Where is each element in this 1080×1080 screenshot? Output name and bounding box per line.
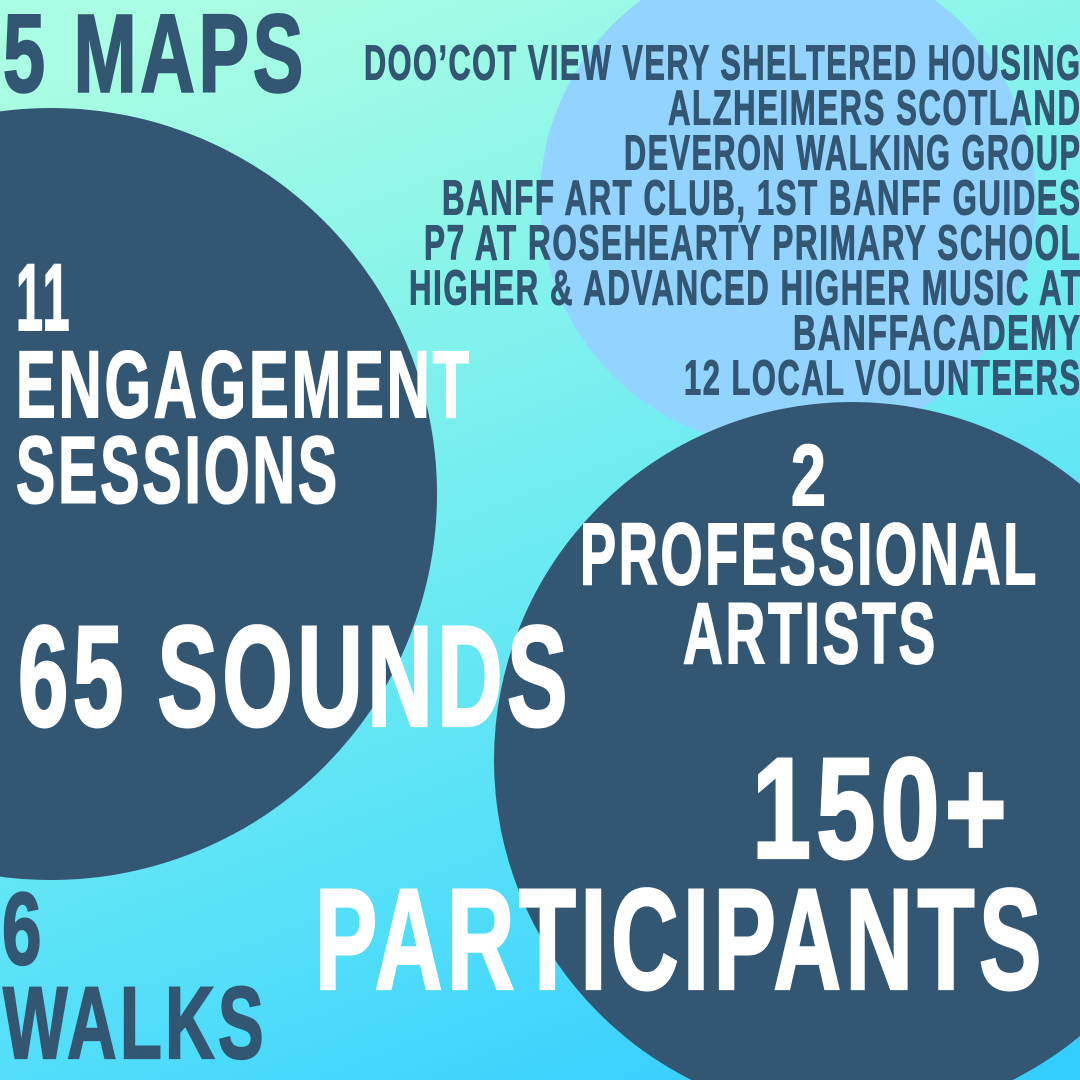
number: 11: 11	[16, 245, 72, 351]
stat: 65 sounds: 65 SOUNDS	[18, 598, 572, 756]
stat: 150+ participants	[315, 730, 1046, 1020]
dark circle: artists and participants	[494, 402, 1080, 1080]
stat: 11 engagement sessions	[16, 245, 472, 524]
light blue circle: participating groups	[540, 0, 1036, 448]
stat: 6 walks	[2, 872, 267, 1080]
label: artists: ARTISTS	[683, 586, 938, 682]
list of participating groups	[364, 36, 1080, 406]
dark circle: engagement and sounds	[0, 108, 437, 880]
number: 2: 2	[791, 428, 829, 524]
label: walks: WALKS	[3, 966, 267, 1080]
label: sessions: SESSIONS	[16, 418, 340, 524]
label: engagement: ENGAGEMENT	[16, 332, 472, 438]
stat: 2 professional artists	[580, 428, 1039, 682]
number: 6: 6	[2, 872, 45, 986]
